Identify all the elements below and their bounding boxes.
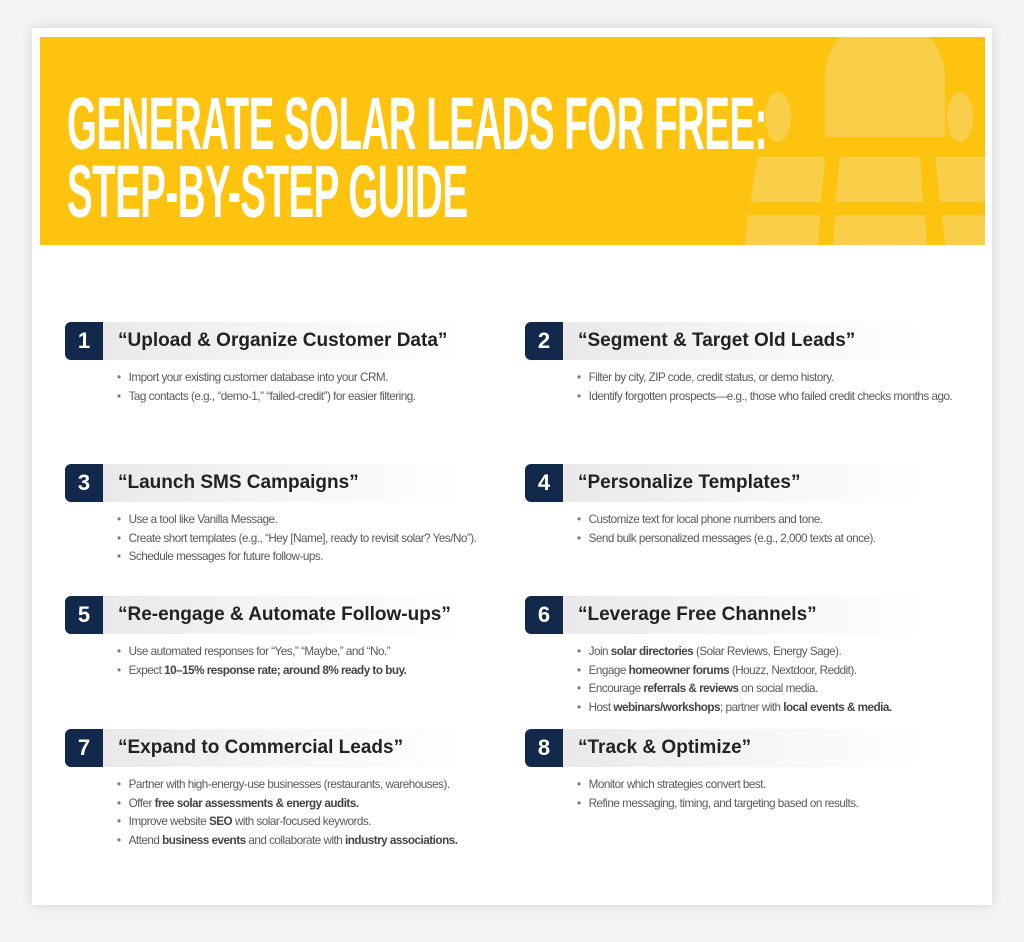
step 7: 7: [78, 735, 90, 760]
step 7: Offer free solar assessments & energy audits.: [129, 796, 359, 810]
step 5: [65, 596, 451, 676]
step 3: “Launch SMS Campaigns”: [118, 472, 359, 493]
step 5: “Re-engage & Automate Follow-ups”: [118, 604, 451, 625]
step 2: Filter by city, ZIP code, credit status, or demo history.: [589, 371, 834, 384]
step 3: [65, 464, 476, 563]
step 1: 1: [78, 328, 90, 353]
step 4: Send bulk personalized messages (e.g., 2,000 texts at once).: [589, 532, 876, 544]
step 3: 3: [78, 470, 90, 495]
step 1: Import your existing customer database into your CRM.: [129, 371, 388, 384]
step 4: [525, 464, 876, 544]
step 7: Attend business events and collaborate with industry associations.: [129, 834, 457, 846]
step 7: [65, 729, 458, 846]
step 6: Engage homeowner forums (Houzz, Nextdoor, Reddit).: [589, 664, 857, 676]
step 1: “Upload & Organize Customer Data”: [118, 330, 447, 351]
step 6: [525, 596, 892, 714]
step 7: “Expand to Commercial Leads”: [118, 737, 403, 758]
title: [67, 82, 767, 233]
step 3: Use a tool like Vanilla Message.: [129, 513, 277, 526]
step 2: [525, 322, 952, 402]
header banner: [40, 37, 985, 245]
step 8: Monitor which strategies convert best.: [589, 778, 766, 791]
step 6: Encourage referrals & reviews on social media.: [589, 682, 818, 695]
step 5: 5: [78, 602, 90, 627]
step 1: Tag contacts (e.g., “demo-1,” “failed-credit”) for easier filtering.: [129, 390, 415, 402]
title: GENERATE SOLAR LEADS FOR FREE:: [67, 82, 767, 165]
step 5: Use automated responses for “Yes,” “Maybe,” and “No.”: [129, 645, 390, 658]
step 5: Expect 10–15% response rate; around 8% ready to buy.: [129, 664, 406, 676]
step 4: 4: [538, 470, 550, 495]
step 8: Refine messaging, timing, and targeting based on results.: [589, 796, 858, 810]
step 3: Schedule messages for future follow-ups.: [129, 550, 323, 563]
step 1: [65, 322, 447, 402]
step 6: 6: [538, 602, 550, 627]
step 6: Join solar directories (Solar Reviews, Energy Sage).: [589, 645, 841, 658]
step 2: “Segment & Target Old Leads”: [578, 330, 855, 351]
step 6: Host webinars/workshops; partner with local events & media.: [589, 700, 892, 714]
step 2: Identify forgotten prospects—e.g., those who failed credit checks months ago.: [589, 390, 952, 402]
step 3: Create short templates (e.g., “Hey [Name], ready to revisit solar? Yes/No”).: [129, 532, 476, 544]
step 6: “Leverage Free Channels”: [578, 604, 817, 625]
step 8: “Track & Optimize”: [578, 737, 751, 758]
step 4: Customize text for local phone numbers and tone.: [589, 513, 823, 526]
decorative solar panel: [745, 37, 985, 245]
step 8: [525, 729, 858, 810]
step 2: 2: [538, 328, 550, 353]
step 7: Partner with high-energy-use businesses (restaurants, warehouses).: [129, 778, 450, 791]
step 4: “Personalize Templates”: [578, 472, 800, 493]
step 7: Improve website SEO with solar-focused keywords.: [129, 815, 371, 828]
step 8: 8: [538, 735, 550, 760]
title: STEP-BY-STEP GUIDE: [67, 150, 467, 233]
